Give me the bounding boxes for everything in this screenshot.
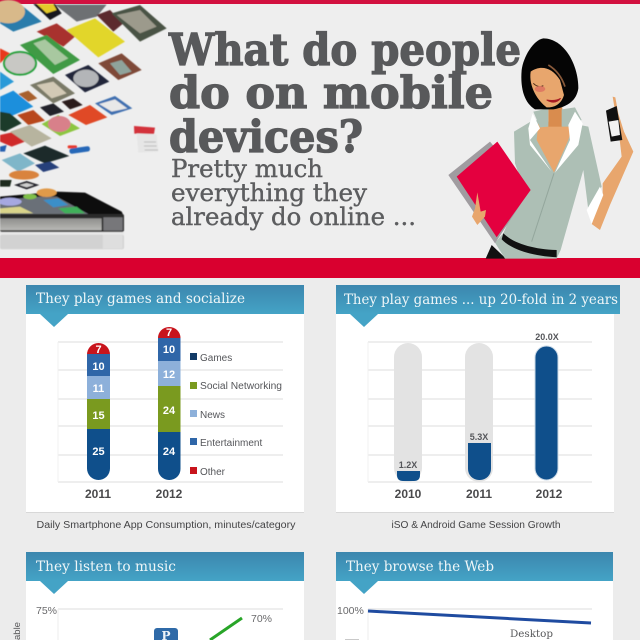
subtitle: already do online ...: [171, 203, 416, 231]
panel heading: [26, 285, 304, 327]
illustration: woman with folder and phone: [448, 38, 633, 259]
x axis labels: [395, 487, 563, 501]
caption: chart 2: iSO & Android Game Session Growth: [392, 520, 560, 531]
gray folder back: [448, 142, 530, 243]
subtitle: everything they: [171, 179, 367, 207]
stacked bar: 2011: 10: [92, 361, 105, 373]
panel: They play games up 20-fold: [336, 285, 620, 513]
title: do on mobile: [169, 68, 493, 119]
bar: 2011: [465, 343, 493, 482]
panel heading: They listen to music: [36, 559, 176, 575]
cuff: [587, 187, 603, 224]
red folder: [457, 142, 531, 237]
panel: They listen to music: [26, 552, 304, 640]
title: devices?: [169, 112, 363, 163]
stacked bar: 2012: 7: [166, 327, 172, 339]
stacked bar: 2011: 7: [95, 344, 102, 356]
stacked bar: 2011: 25: [92, 446, 105, 458]
top red bar: [0, 0, 640, 4]
x axis labels: 2011: [85, 487, 111, 501]
rotated axis label: able: [12, 622, 23, 640]
icon: document: [134, 126, 158, 153]
subtitle: [171, 155, 416, 231]
hair: [521, 38, 578, 109]
bar: 2012: 20.0X: [535, 332, 559, 342]
subtitle: Pretty much: [171, 155, 323, 183]
value label 70%: 70%: [251, 613, 272, 625]
axis label 75%: 75%: [36, 605, 57, 617]
x axis labels: 2011: [466, 487, 492, 501]
caption: chart 1: Daily Smartphone App Consumption, minutes/category: [36, 520, 296, 531]
title: What do people: [168, 25, 521, 76]
title: [168, 25, 521, 163]
phone: [606, 106, 622, 142]
panel heading: They play games and socialize: [36, 291, 245, 307]
x axis labels: 2012: [536, 487, 563, 501]
red band: [0, 258, 640, 278]
neck and chest: [537, 123, 573, 173]
x axis labels: [85, 487, 183, 501]
stacked bar: 2012: 24: [163, 446, 176, 458]
stacked bar: 2011: [87, 343, 110, 480]
skirt: [486, 245, 506, 259]
bar: 2010: [394, 343, 422, 482]
bar: 2010: 1.2X: [399, 460, 417, 470]
stacked bar: 2012: 10: [163, 344, 175, 356]
jacket: [495, 120, 602, 259]
legend: Entertainment: [200, 438, 262, 449]
legend: News: [200, 410, 225, 421]
panel heading: They browse the Web: [346, 559, 494, 575]
face: [530, 68, 564, 107]
panel heading: [336, 552, 613, 594]
belt: [502, 233, 557, 257]
phone: [0, 188, 124, 249]
panel: They play games and socialize: [26, 285, 304, 513]
panel heading: [336, 285, 620, 327]
illustration: app icons: [0, 0, 167, 249]
x axis labels: 2012: [156, 487, 183, 501]
stacked bar: 2012: [158, 327, 181, 480]
stacked bar: 2012: 12: [163, 369, 175, 381]
axis label 100%: 100%: [337, 605, 364, 617]
stacked bar: 2012: 24: [163, 405, 176, 417]
legend: [190, 353, 282, 478]
panel: They browse the Web: [336, 552, 613, 640]
bar: 2012: [535, 332, 559, 480]
header background: [0, 0, 640, 258]
x axis labels: 2010: [395, 487, 422, 501]
panel heading: They play games ... up 20-fold in 2 years: [344, 292, 618, 308]
panel heading: [26, 552, 304, 594]
icon: Pandora: [154, 628, 178, 640]
arm raised: [592, 97, 633, 230]
legend: Other: [200, 467, 226, 478]
legend: Social Networking: [200, 381, 282, 392]
bar: 2011: 5.3X: [470, 432, 488, 442]
legend: Games: [200, 353, 232, 364]
series label Desktop: Desktop: [510, 628, 553, 640]
stacked bar: 2011: 11: [93, 383, 104, 395]
line series: Desktop: [368, 611, 591, 623]
line series: Pandora: [210, 618, 242, 640]
hand: [472, 192, 486, 225]
stacked bar: 2011: 15: [92, 410, 105, 422]
collar: [533, 108, 548, 127]
